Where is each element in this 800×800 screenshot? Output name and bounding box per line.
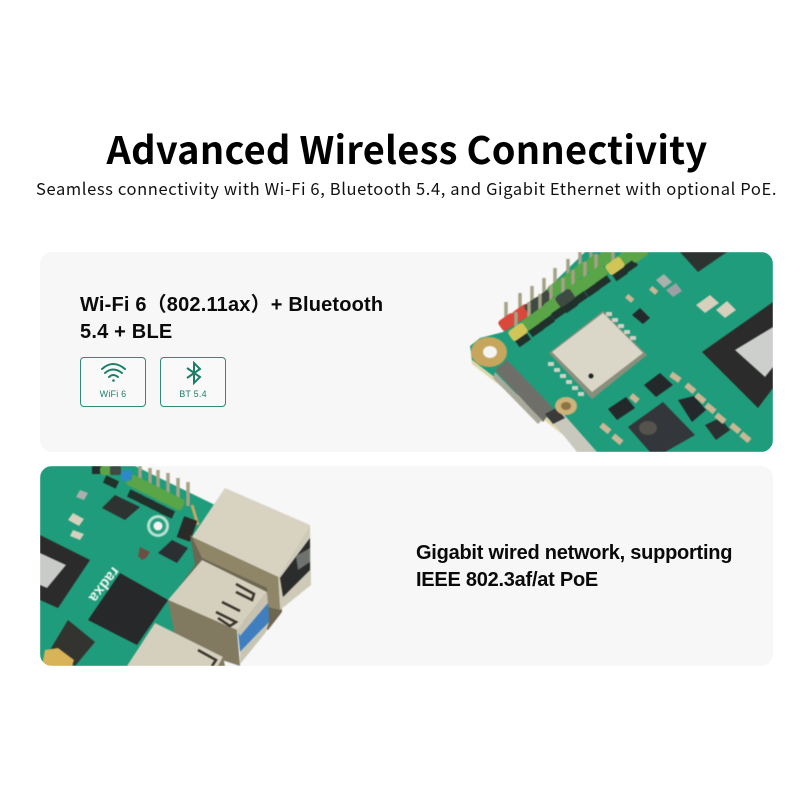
heading: gigabit network: IEEE 802.3af/at PoE	[416, 568, 598, 590]
badge: BT 5.4	[160, 357, 226, 407]
badge: WiFi 6	[80, 357, 146, 407]
FPC connectors	[495, 360, 553, 422]
other chips	[680, 252, 727, 272]
badge: WiFi 6: WiFi 6	[100, 389, 126, 399]
mounting hole	[147, 515, 169, 537]
header pins	[92, 466, 198, 542]
heading: wifi and bluetooth: Wi-Fi 6（802.11ax）+ Bluetooth	[80, 294, 383, 316]
badge: BT 5.4: BT 5.4	[179, 389, 207, 399]
USB port 2	[127, 623, 223, 666]
panel: wired network	[40, 466, 773, 666]
main SoC	[702, 302, 773, 408]
heading: gigabit network	[416, 542, 732, 590]
title: Advanced Wireless Connectivity	[107, 120, 707, 175]
audio jack	[50, 620, 95, 666]
mounting hole	[471, 337, 507, 367]
USB port 1	[238, 600, 269, 652]
wifi module	[549, 311, 647, 399]
antenna connector	[555, 397, 577, 415]
heading: gigabit network: Gigabit wired network, supporting	[416, 542, 732, 564]
heading: wifi and bluetooth: 5.4 + BLE	[80, 320, 172, 342]
subtitle: Seamless connectivity with Wi-Fi 6, Bluetooth 5.4, and Gigabit Ethernet with optional PoE.	[36, 176, 777, 200]
photo: board with ethernet and USB ports	[40, 466, 312, 666]
panel: wireless	[40, 252, 773, 452]
ethernet port	[170, 535, 282, 630]
header pins	[497, 244, 649, 347]
heading: wifi and bluetooth	[80, 294, 383, 342]
photo: board with wireless module	[469, 252, 773, 452]
chips	[102, 495, 140, 520]
logo: radxa: radxa	[85, 564, 123, 606]
passive components	[599, 286, 752, 445]
